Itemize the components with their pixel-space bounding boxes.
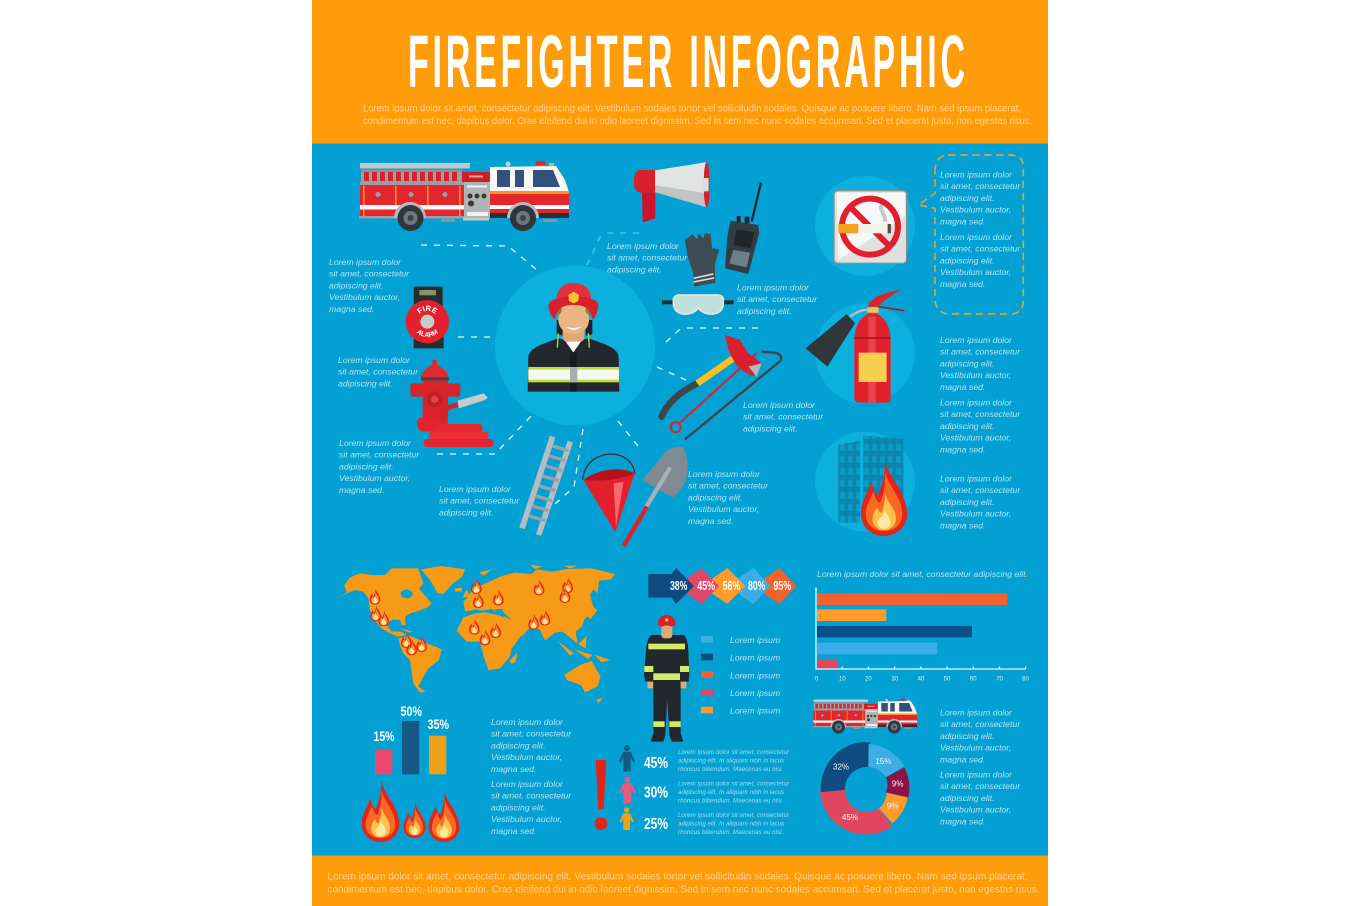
icon: fire truck large xyxy=(359,161,569,231)
people statistics: adipiscing elit. In aliquam nibh in lacus xyxy=(678,758,784,764)
people statistics xyxy=(619,745,790,836)
text blocks: top section: sit amet, consectetur xyxy=(329,269,410,279)
arrow percentage strip: 56% xyxy=(723,579,740,593)
three flames xyxy=(362,779,459,842)
text blocks: top section: Vestibulum auctor, xyxy=(688,504,759,514)
text blocks: top section: sit amet, consectetur xyxy=(940,485,1021,495)
people statistics: rhoncus bibendum. Maecenas eu nisi. xyxy=(678,766,783,773)
text blocks: lower left: adipiscing elit. xyxy=(491,740,546,750)
icon: fire alarm: FIRE xyxy=(416,306,438,314)
people statistics: Lorem ipsum dolor sit amet, consectetur xyxy=(678,749,790,756)
legend: Lorem ipsum xyxy=(730,706,780,716)
text blocks: top section: sit amet, consectetur xyxy=(940,244,1021,254)
text blocks: top section: Lorem ipsum dolor xyxy=(940,335,1013,345)
text blocks: top section: adipiscing elit. xyxy=(737,306,792,316)
icon: no smoking sign xyxy=(815,176,915,276)
text blocks: top section: adipiscing elit. xyxy=(688,492,743,502)
horizontal bar chart: 0 xyxy=(815,676,819,682)
text blocks: top section: adipiscing elit. xyxy=(339,461,394,471)
horizontal bar chart: 80 xyxy=(1022,676,1030,682)
title: FIREFIGHTER INFOGRAPHIC xyxy=(408,21,965,104)
icon: fire alarm: ALARM xyxy=(416,329,438,338)
icon: ladder xyxy=(522,437,570,535)
header description: Lorem ipsum dolor sit amet, consectetur adipiscing elit. Vestibulum sodales tortor vel sollicitudin sodales. Quisque ac posuere libero. Nam sed ipsum placerat, xyxy=(363,104,1021,114)
text blocks: top section: adipiscing elit. xyxy=(940,497,995,507)
text blocks: top section: sit amet, consectetur xyxy=(688,481,769,491)
text blocks: top section: Vestibulum auctor, xyxy=(339,473,410,483)
text blocks: lower left: adipiscing elit. xyxy=(491,802,546,812)
legend xyxy=(701,635,780,716)
text blocks: top section: Lorem ipsum dolor xyxy=(940,474,1013,484)
text blocks: top section: Lorem ipsum dolor xyxy=(940,232,1013,242)
text blocks: top section: sit amet, consectetur xyxy=(439,496,520,506)
text blocks: lower left: Lorem ipsum dolor xyxy=(491,779,564,789)
text blocks: top section: Vestibulum auctor, xyxy=(940,370,1011,380)
donut chart: 15% xyxy=(875,757,891,766)
icon: shovel xyxy=(624,447,688,546)
people statistics: 30% xyxy=(644,784,668,802)
text blocks: top section: sit amet, consectetur xyxy=(737,294,818,304)
text blocks: lower right: Lorem ipsum dolor xyxy=(940,708,1013,718)
text blocks: top section: sit amet, consectetur xyxy=(940,409,1021,419)
text blocks: top section: magna sed. xyxy=(940,279,985,289)
text blocks: top section: magna sed. xyxy=(329,304,374,314)
text blocks: top section: Lorem ipsum dolor xyxy=(940,398,1013,408)
icon: radio xyxy=(725,183,761,274)
arrow percentage strip: 45% xyxy=(697,579,715,593)
text blocks: lower left: magna sed. xyxy=(491,764,536,774)
text blocks: top section: magna sed. xyxy=(339,485,384,495)
arrow percentage strip: 80% xyxy=(748,579,765,593)
donut chart: 32% xyxy=(833,762,849,771)
horizontal bar chart: 10 xyxy=(839,676,846,682)
icon: bucket xyxy=(583,454,635,532)
arrow percentage strip xyxy=(648,568,797,604)
text blocks: lower left: sit amet, consectetur xyxy=(491,729,572,739)
text blocks: top section: adipiscing elit. xyxy=(940,255,995,265)
bar chart: three percentages: 35% xyxy=(428,716,449,732)
people statistics: adipiscing elit. In aliquam nibh in lacus xyxy=(678,789,784,796)
text blocks: top section: adipiscing elit. xyxy=(743,423,798,433)
icon: fire alarm xyxy=(406,286,449,348)
text blocks: lower right: magna sed. xyxy=(940,754,985,764)
connector lines xyxy=(421,233,758,504)
icon: fire extinguisher xyxy=(806,290,915,403)
text blocks: top section: magna sed. xyxy=(940,444,985,454)
header description: condimentum est nec, dapibus dolor. Cras eleifend dui in odio laoreet dignissim. Sed in sem nec nunc sodales accumsan. Sed et placerat justo, non egestas risus. xyxy=(363,116,1032,127)
text blocks: top section: sit amet, consectetur xyxy=(940,181,1021,191)
text blocks: top section: magna sed. xyxy=(688,516,733,526)
icon: burning building xyxy=(815,432,915,532)
legend: Lorem ipsum xyxy=(730,653,780,663)
text blocks: top section: Lorem ipsum dolor xyxy=(339,438,412,448)
text blocks: lower right: Vestibulum auctor, xyxy=(940,805,1011,815)
text blocks: lower right xyxy=(940,708,1021,826)
horizontal bar chart: Lorem ipsum dolor sit amet, consectetur adipiscing elit. xyxy=(817,569,1028,579)
text blocks: top section: Vestibulum auctor, xyxy=(940,267,1011,277)
text blocks: top section: Lorem ipsum dolor xyxy=(743,400,816,410)
text blocks: lower right: sit amet, consectetur xyxy=(940,719,1021,729)
text blocks: lower left xyxy=(491,717,572,836)
text blocks: top section: Lorem ipsum dolor xyxy=(338,355,411,365)
donut chart: 45% xyxy=(842,813,858,822)
text blocks: lower right: Lorem ipsum dolor xyxy=(940,770,1013,780)
text blocks: top section: Vestibulum auctor, xyxy=(940,433,1011,443)
horizontal bar chart: 50 xyxy=(944,676,951,682)
text blocks: lower right: magna sed. xyxy=(940,816,985,826)
text blocks: top section: adipiscing elit. xyxy=(329,280,384,290)
text blocks: top section: magna sed. xyxy=(940,520,985,530)
text blocks: top section: adipiscing elit. xyxy=(940,358,995,368)
text blocks: top section: sit amet, consectetur xyxy=(339,450,420,460)
people statistics: 25% xyxy=(644,816,668,833)
text blocks: top section: Lorem ipsum dolor xyxy=(607,241,680,251)
text blocks: top section: adipiscing elit. xyxy=(940,421,995,431)
text blocks: top section: adipiscing elit. xyxy=(338,378,393,388)
legend: Lorem ipsum xyxy=(730,635,780,645)
text blocks: top section: Lorem ipsum dolor xyxy=(688,469,761,479)
standing firefighter xyxy=(644,615,689,742)
text blocks: lower right: adipiscing elit. xyxy=(940,731,995,741)
legend: Lorem ipsum xyxy=(730,688,780,698)
text blocks: top section: Vestibulum auctor, xyxy=(940,509,1011,519)
text blocks: lower right: sit amet, consectetur xyxy=(940,781,1021,791)
text blocks: top section: adipiscing elit. xyxy=(940,193,995,203)
icon: goggles xyxy=(662,295,734,314)
icon: exclamation mark xyxy=(595,760,607,830)
text blocks: lower left: magna sed. xyxy=(491,826,536,836)
text blocks: top section xyxy=(329,170,1021,530)
text blocks: lower left: sit amet, consectetur xyxy=(491,791,572,801)
people statistics: Lorem ipsum dolor sit amet, consectetur xyxy=(678,812,790,819)
text blocks: top section: sit amet, consectetur xyxy=(607,253,688,263)
bar chart: three percentages: 50% xyxy=(400,703,422,719)
people statistics: Lorem ipsum dolor sit amet, consectetur xyxy=(678,780,790,788)
horizontal bar chart: 60 xyxy=(970,676,977,682)
icon: axe and crowbar xyxy=(662,335,781,439)
arrow percentage strip: 38% xyxy=(670,579,687,593)
background xyxy=(312,0,1048,906)
legend: Lorem ipsum xyxy=(730,670,780,680)
icon: glove xyxy=(685,233,719,287)
text blocks: top section: magna sed. xyxy=(940,216,985,226)
horizontal bar chart: 40 xyxy=(918,676,925,682)
people statistics: rhoncus bibendum. Maecenas eu nisi. xyxy=(678,829,783,836)
icon: megaphone xyxy=(634,162,710,222)
callout bubble xyxy=(918,155,1023,314)
people statistics: rhoncus bibendum. Maecenas eu nisi. xyxy=(678,798,783,804)
text blocks: top section: adipiscing elit. xyxy=(439,507,494,517)
text blocks: lower right: Vestibulum auctor, xyxy=(940,743,1011,753)
text blocks: lower left: Vestibulum auctor, xyxy=(491,814,562,824)
bar chart: three percentages xyxy=(374,703,449,774)
horizontal bar chart: 70 xyxy=(996,676,1004,682)
text blocks: top section: adipiscing elit. xyxy=(607,264,662,274)
text blocks: lower left: Vestibulum auctor, xyxy=(491,752,562,762)
people statistics: adipiscing elit. In aliquam nibh in lacus xyxy=(678,820,784,828)
text blocks: top section: magna sed. xyxy=(940,382,985,392)
horizontal bar chart: 30 xyxy=(891,676,899,682)
horizontal bar chart: 20 xyxy=(865,676,872,682)
horizontal bar chart xyxy=(815,569,1030,682)
icon: fire truck small xyxy=(813,698,917,734)
text blocks: top section: Lorem ipsum dolor xyxy=(329,257,402,267)
arrow percentage strip: 95% xyxy=(773,579,791,593)
text blocks: top section: Lorem ipsum dolor xyxy=(439,484,512,494)
donut chart: 9% xyxy=(892,779,903,788)
firefighter portrait in circle xyxy=(495,266,655,426)
icon: flame large xyxy=(861,458,907,536)
text blocks: lower left: Lorem ipsum dolor xyxy=(491,717,564,727)
text blocks: top section: Vestibulum auctor, xyxy=(329,292,400,302)
footer band: condimentum est nec, dapibus dolor. Cras eleifend dui in odio laoreet dignissim. Sed in sem nec nunc sodales accumsan. Sed et placerat justo, non egestas risus. xyxy=(328,884,1040,896)
world map with fire markers xyxy=(336,565,615,703)
text blocks: top section: sit amet, consectetur xyxy=(743,412,824,422)
bar chart: three percentages: 15% xyxy=(374,728,395,744)
footer band xyxy=(312,856,1048,906)
text blocks: top section: sit amet, consectetur xyxy=(940,347,1021,357)
donut chart xyxy=(820,742,909,834)
donut chart: 9% xyxy=(887,802,898,811)
icon: hydrant with hose xyxy=(410,360,494,447)
text blocks: lower right: adipiscing elit. xyxy=(940,793,995,803)
text blocks: top section: Lorem ipsum dolor xyxy=(940,170,1013,180)
header band xyxy=(312,0,1048,144)
people statistics: 45% xyxy=(644,755,668,772)
footer band: Lorem ipsum dolor sit amet, consectetur adipiscing elit. Vestibulum sodales tortor vel sollicitudin sodales. Quisque ac posuere libero. Nam sed ipsum placerat, xyxy=(328,872,1028,882)
text blocks: top section: sit amet, consectetur xyxy=(338,367,419,377)
text blocks: top section: Lorem ipsum dolor xyxy=(737,282,810,292)
text blocks: top section: Vestibulum auctor, xyxy=(940,205,1011,215)
